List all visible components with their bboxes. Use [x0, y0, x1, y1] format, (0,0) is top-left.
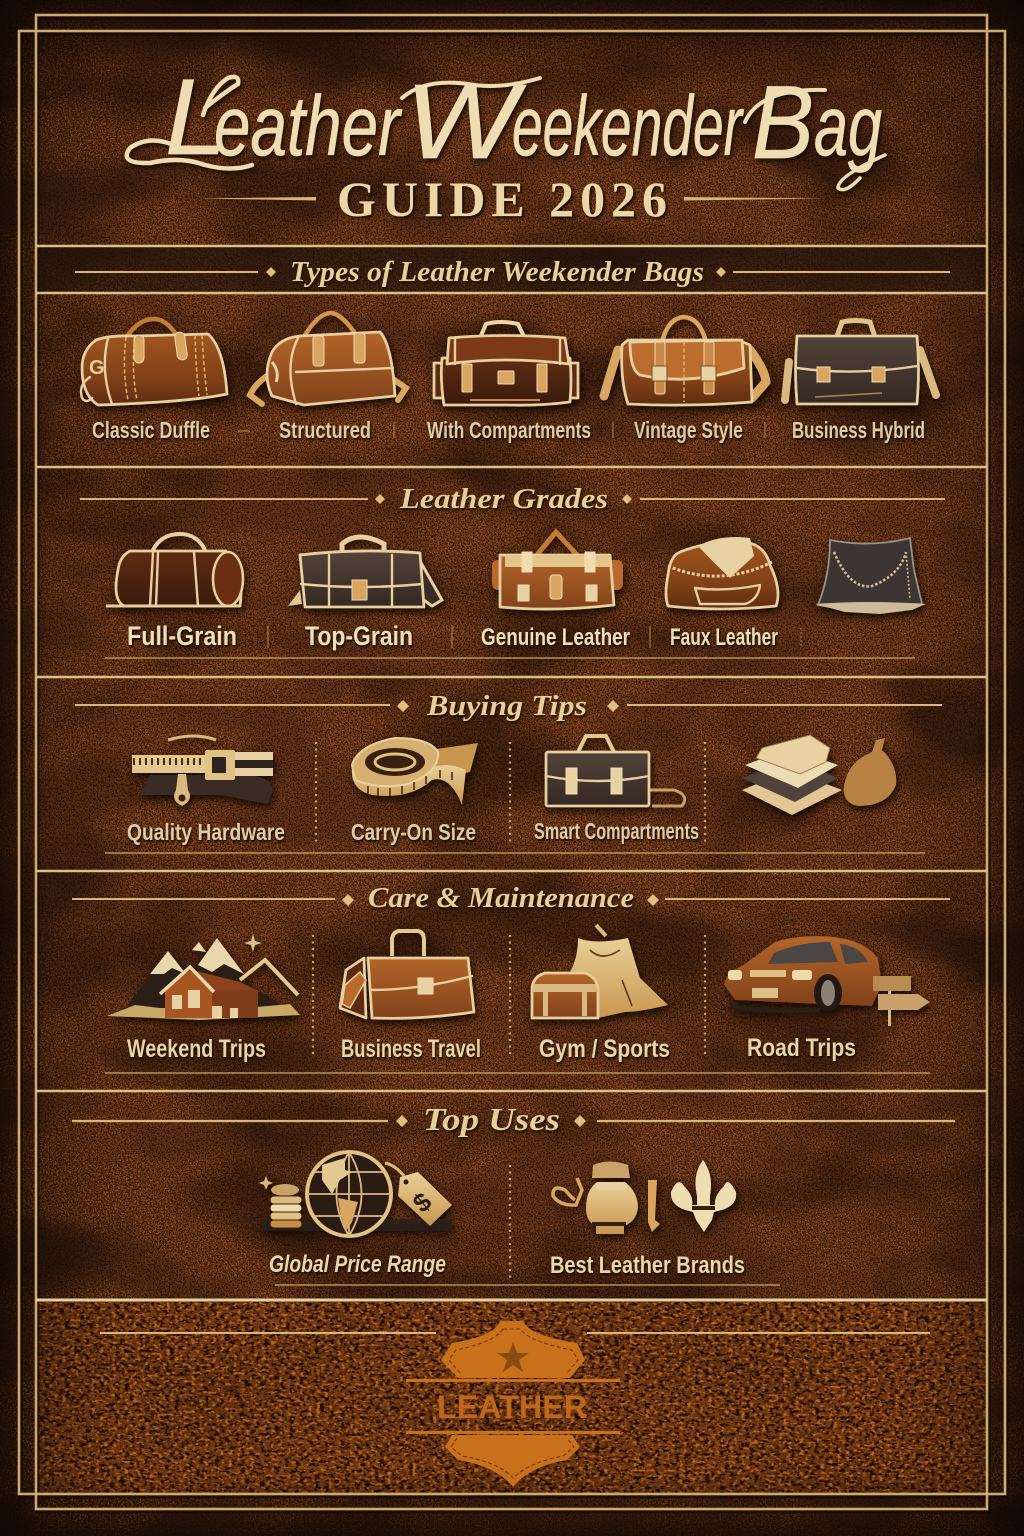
section: care and maintenance — [72, 882, 950, 1063]
heading: care and maintenance: Care & Maintenance — [368, 882, 634, 914]
title — [127, 56, 885, 227]
labels: care — [127, 1034, 856, 1063]
icon: mountains and cabin — [107, 934, 300, 1020]
icon: classic duffle bag: G — [89, 357, 105, 379]
footer rule — [100, 1332, 930, 1334]
leather badge — [406, 1321, 620, 1487]
heading: top uses: Top Uses — [423, 1101, 560, 1137]
labels: top uses: Best Leather Brands — [550, 1252, 745, 1279]
labels: grades: Full-Grain — [127, 621, 237, 651]
heading: buying tips — [75, 690, 942, 722]
badge upper shield — [441, 1321, 585, 1378]
badge word: LEATHER — [437, 1389, 587, 1425]
labels: care: Business Travel — [341, 1035, 481, 1063]
title script line: L — [165, 56, 227, 177]
icon: top-grain bag — [288, 537, 442, 607]
subtitle: guide 2026: GUIDE 2026 — [337, 171, 667, 227]
icon: full-grain bag — [106, 534, 243, 606]
title script line: W — [405, 63, 527, 181]
icon: dark pouch — [815, 538, 926, 614]
title script line — [127, 56, 885, 190]
icon: business hybrid bag — [785, 320, 936, 404]
labels: bag types: With Compartments — [427, 417, 591, 443]
icon: bag with compartments — [434, 322, 578, 405]
icon: classic duffle bag — [81, 319, 227, 405]
icon: globe, coins and price tag — [259, 1152, 452, 1236]
heading: types: Types of Leather Weekender Bags — [290, 256, 704, 288]
labels: grades — [127, 621, 778, 651]
labels: buying tips: Quality Hardware — [127, 819, 285, 845]
labels: care: Weekend Trips — [127, 1035, 266, 1063]
icon: vintage style bag — [604, 317, 766, 405]
heading: top uses — [72, 1101, 955, 1137]
title script line: eekender — [512, 79, 744, 173]
icon: zipper hardware — [132, 736, 273, 806]
labels: care: Gym / Sports — [539, 1035, 670, 1063]
heading: care and maintenance — [72, 882, 950, 914]
heading: leather grades — [80, 483, 945, 515]
icon: globe, coins and price tag: $ — [407, 1186, 438, 1219]
title script line: ag — [814, 79, 882, 173]
heading: types — [75, 256, 950, 288]
badge stitching — [449, 1329, 578, 1478]
labels: buying tips: Carry-On Size — [351, 819, 476, 845]
labels: care: Road Trips — [747, 1034, 856, 1062]
icon: smart compartments briefcase — [546, 736, 685, 806]
title script line: B — [752, 65, 814, 181]
labels: grades: Faux Leather — [670, 624, 778, 651]
section: top uses — [72, 1101, 955, 1280]
badge star — [497, 1342, 529, 1372]
section: buying tips — [75, 690, 942, 846]
labels: bag types: Vintage Style — [634, 417, 743, 443]
icon: genuine leather bag — [492, 532, 623, 609]
labels: grades: Top-Grain — [305, 621, 413, 651]
labels: grades: Genuine Leather — [481, 624, 630, 651]
icon: business travel briefcase — [340, 931, 474, 1018]
labels: bag types — [92, 417, 925, 443]
subtitle rules — [200, 197, 825, 200]
labels: top uses: Global Price Range — [269, 1251, 446, 1278]
labels: buying tips — [127, 818, 699, 845]
icon: measuring tape — [352, 738, 478, 805]
labels: buying tips: Smart Compartments — [534, 818, 699, 844]
header band shading — [38, 247, 986, 292]
title script line: eather — [214, 79, 402, 173]
labels: bag types: Classic Duffle — [92, 417, 210, 443]
labels: bag types: Structured — [279, 417, 371, 443]
section rules — [36, 246, 987, 1300]
badge rules — [406, 1379, 620, 1434]
section: types of leather weekender bags — [75, 256, 950, 443]
icon: structured bag — [250, 313, 406, 405]
icon: faux leather bag — [666, 537, 778, 609]
badge lower shield — [445, 1435, 580, 1487]
icon: car and signpost — [724, 936, 930, 1026]
heading: buying tips: Buying Tips — [426, 690, 587, 722]
heading: leather grades: Leather Grades — [399, 483, 608, 515]
labels: top uses — [269, 1251, 745, 1279]
labels: bag types: Business Hybrid — [792, 417, 925, 443]
faint section underlines — [105, 658, 930, 1285]
icon: leather brand emblems — [553, 1160, 736, 1234]
section: leather grades — [80, 483, 945, 651]
icon: gym bag and towel — [532, 925, 668, 1018]
icon: leather swatch stack and pouch — [742, 735, 896, 815]
